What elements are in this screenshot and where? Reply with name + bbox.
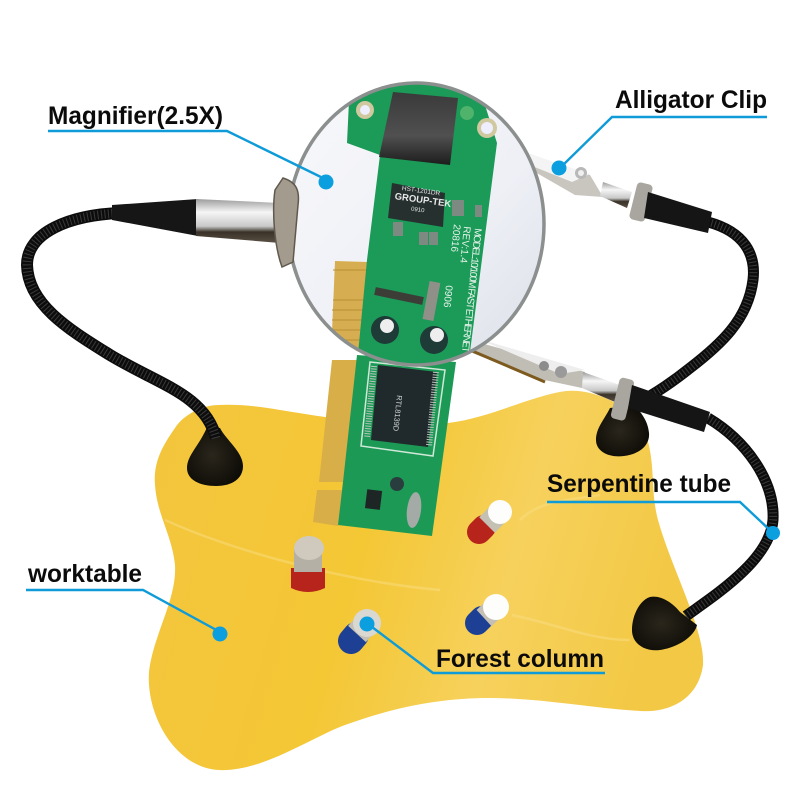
green board xyxy=(338,355,456,536)
circuit board lower part xyxy=(313,355,456,536)
right blue post xyxy=(477,594,509,623)
chip pins xyxy=(367,366,436,446)
transformer text: GROUP-TEK xyxy=(394,191,452,210)
magnified gold fingers xyxy=(332,261,367,348)
capacitor xyxy=(390,477,404,491)
magnified board body xyxy=(347,80,497,375)
lower alligator clip xyxy=(470,338,710,432)
label: worktable xyxy=(26,560,228,642)
label: Forest column: Forest column xyxy=(436,645,604,673)
label: Serpentine tube xyxy=(547,470,780,540)
left black sleeve xyxy=(112,199,198,236)
board text: 0906 xyxy=(441,285,454,308)
lens glass xyxy=(288,83,544,365)
upper alligator clip xyxy=(530,154,712,233)
magnifier xyxy=(274,80,544,380)
label: Serpentine tube: Serpentine tube xyxy=(547,470,731,498)
transformer xyxy=(388,183,445,227)
board text: MODEL:10/100M FAST ETHERNET xyxy=(459,228,483,353)
chip outline xyxy=(361,362,445,456)
board text: 20816 xyxy=(448,224,462,253)
board text xyxy=(444,224,482,351)
capacitors xyxy=(371,316,448,354)
transformer text: 0910 xyxy=(411,207,425,214)
mounting holes xyxy=(356,101,497,138)
label: Magnifier: Magnifier(2.5X) xyxy=(48,102,223,130)
upper right serpentine tube xyxy=(650,222,753,396)
diode xyxy=(375,291,423,301)
small components xyxy=(393,200,482,245)
left serpentine tube xyxy=(27,213,216,438)
connector xyxy=(379,92,458,165)
back right base xyxy=(596,405,649,456)
glass diode xyxy=(428,282,435,320)
silver magnifier arm xyxy=(196,199,280,243)
lower right serpentine tube xyxy=(686,418,773,616)
small chip xyxy=(365,489,382,510)
label: Alligator Clip: Alligator Clip xyxy=(615,86,767,114)
finger lines xyxy=(331,270,367,340)
magnified board xyxy=(330,80,497,380)
chip label: RTL8139D xyxy=(391,395,404,432)
label: Alligator Clip xyxy=(552,86,767,176)
label: worktable: worktable xyxy=(27,560,142,588)
front right base xyxy=(632,597,697,650)
transformer text: HST-1201DR xyxy=(401,185,441,197)
posts xyxy=(291,500,512,641)
lens rim xyxy=(288,83,544,365)
label: Forest column xyxy=(360,616,605,673)
board text: REV:1.4 xyxy=(457,226,472,264)
processor chip xyxy=(371,365,437,447)
label: Magnifier xyxy=(48,102,334,190)
LED xyxy=(460,106,474,120)
table reflections xyxy=(165,495,630,640)
transformer text xyxy=(395,186,452,212)
left base xyxy=(187,425,243,486)
left red post xyxy=(291,536,325,592)
worktable xyxy=(149,391,703,770)
gold fingers xyxy=(313,360,358,526)
magnifier clamp xyxy=(274,178,298,267)
front blue post xyxy=(351,609,381,641)
right red post xyxy=(479,500,512,532)
crystal xyxy=(405,491,423,529)
